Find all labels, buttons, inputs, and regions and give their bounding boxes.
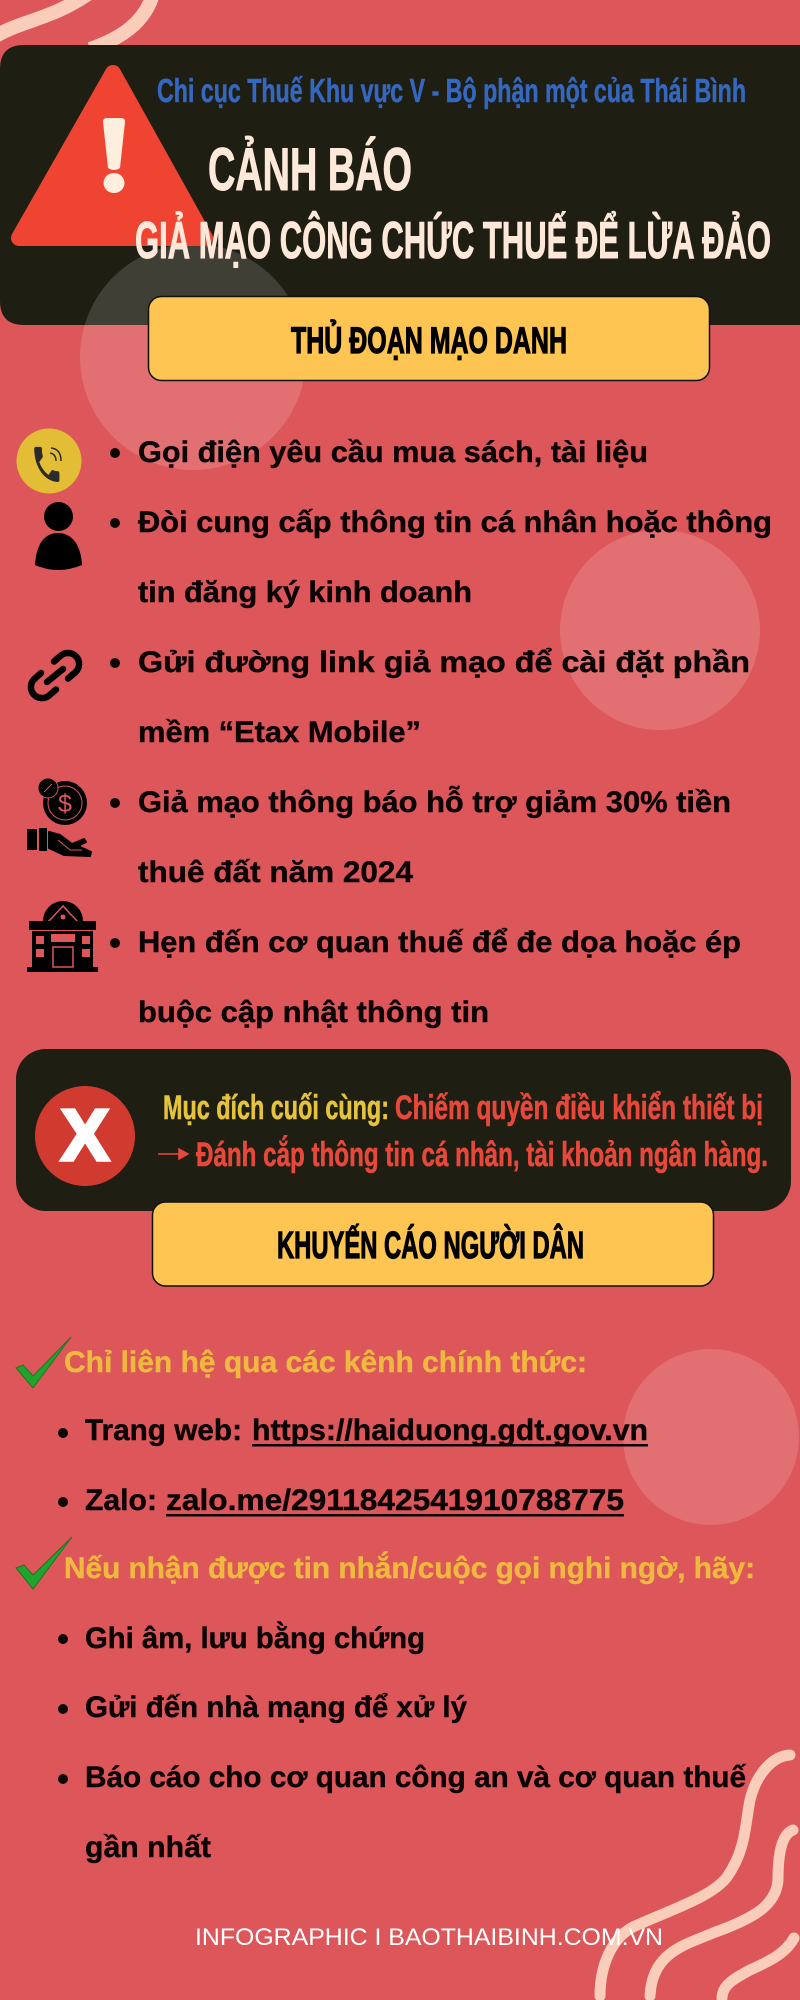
list: impersonation tricks: Giả mạo thông báo hỗ trợ giảm 30% tiền [138,785,731,819]
list: impersonation tricks: Gửi đường link giả mạo để cài đặt phần [138,646,750,679]
list: impersonation tricks: buộc cập nhật thông tin [138,996,489,1029]
panel: final goal callout [16,1049,791,1211]
list: impersonation tricks: mềm “Etax Mobile” [138,716,421,749]
decoration: bottom-right squiggles [600,1755,794,1998]
list: what to do [58,1621,746,1864]
heading: advice to citizens [152,1202,714,1286]
list: official channels [58,1414,648,1517]
subheading: official channels: Chỉ liên hệ qua các kênh chính thức: [64,1346,587,1379]
list: impersonation tricks: Gọi điện yêu cầu mua sách, tài liệu [138,436,648,469]
list: what to do: Gửi đến nhà mạng để xử lý [85,1691,467,1724]
list: what to do: Ghi âm, lưu bằng chứng [85,1621,425,1655]
list: impersonation tricks: Đòi cung cấp thông tin cá nhân hoặc thông [138,506,772,539]
heading: impersonation tricks: THỦ ĐOẠN MẠO DANH [291,319,567,361]
list: impersonation tricks: tin đăng ký kinh doanh [138,576,472,609]
icon: money in hand: $ [58,790,72,818]
icon: check mark 1 [16,1337,71,1388]
icon: link [31,653,79,698]
decoration: translucent circle middle [560,530,760,730]
list: what to do: Báo cáo cho cơ quan công an và cơ quan thuế [85,1761,746,1794]
callout text: Mục đích cuối cùng: [163,1089,389,1127]
icon: phone [16,428,82,494]
list: official channels: https://haiduong.gdt.gov.vn [252,1414,648,1447]
decoration: translucent circle top [80,244,306,470]
heading: advice to citizens: KHUYẾN CÁO NGƯỜI DÂN [277,1223,584,1267]
list: what to do: gần nhất [85,1831,211,1864]
list: official channels: zalo.me/2911842541910788775 [166,1484,624,1517]
list: official channels: Trang web: [85,1414,242,1447]
icon: check mark 2 [16,1537,72,1589]
list: impersonation tricks: thuê đất năm 2024 [138,856,413,889]
decoration: top-left squiggles [0,0,153,49]
icon: red X [35,1086,135,1186]
icon: tax office building [27,901,98,972]
icon: warning triangle [19,73,205,238]
heading: impersonation tricks [148,296,710,380]
list: impersonation tricks: Hẹn đến cơ quan thuế để đe dọa hoặc ép [138,926,741,959]
list: impersonation tricks [110,436,772,1029]
title: warning: CẢNH BÁO [208,136,412,203]
footer source: INFOGRAPHIC I BAOTHAIBINH.COM.VN [195,1924,663,1951]
callout text [158,1089,768,1174]
icon: money in hand [27,778,91,856]
list: official channels: Zalo: [85,1484,157,1517]
panel: header background [0,45,800,325]
icon: person [35,502,82,570]
icon: red X: X [61,1096,109,1176]
subheading: if suspicious: Nếu nhận được tin nhắn/cuộc gọi nghi ngờ, hãy: [64,1551,755,1585]
decoration: translucent circle lower [623,1349,799,1525]
